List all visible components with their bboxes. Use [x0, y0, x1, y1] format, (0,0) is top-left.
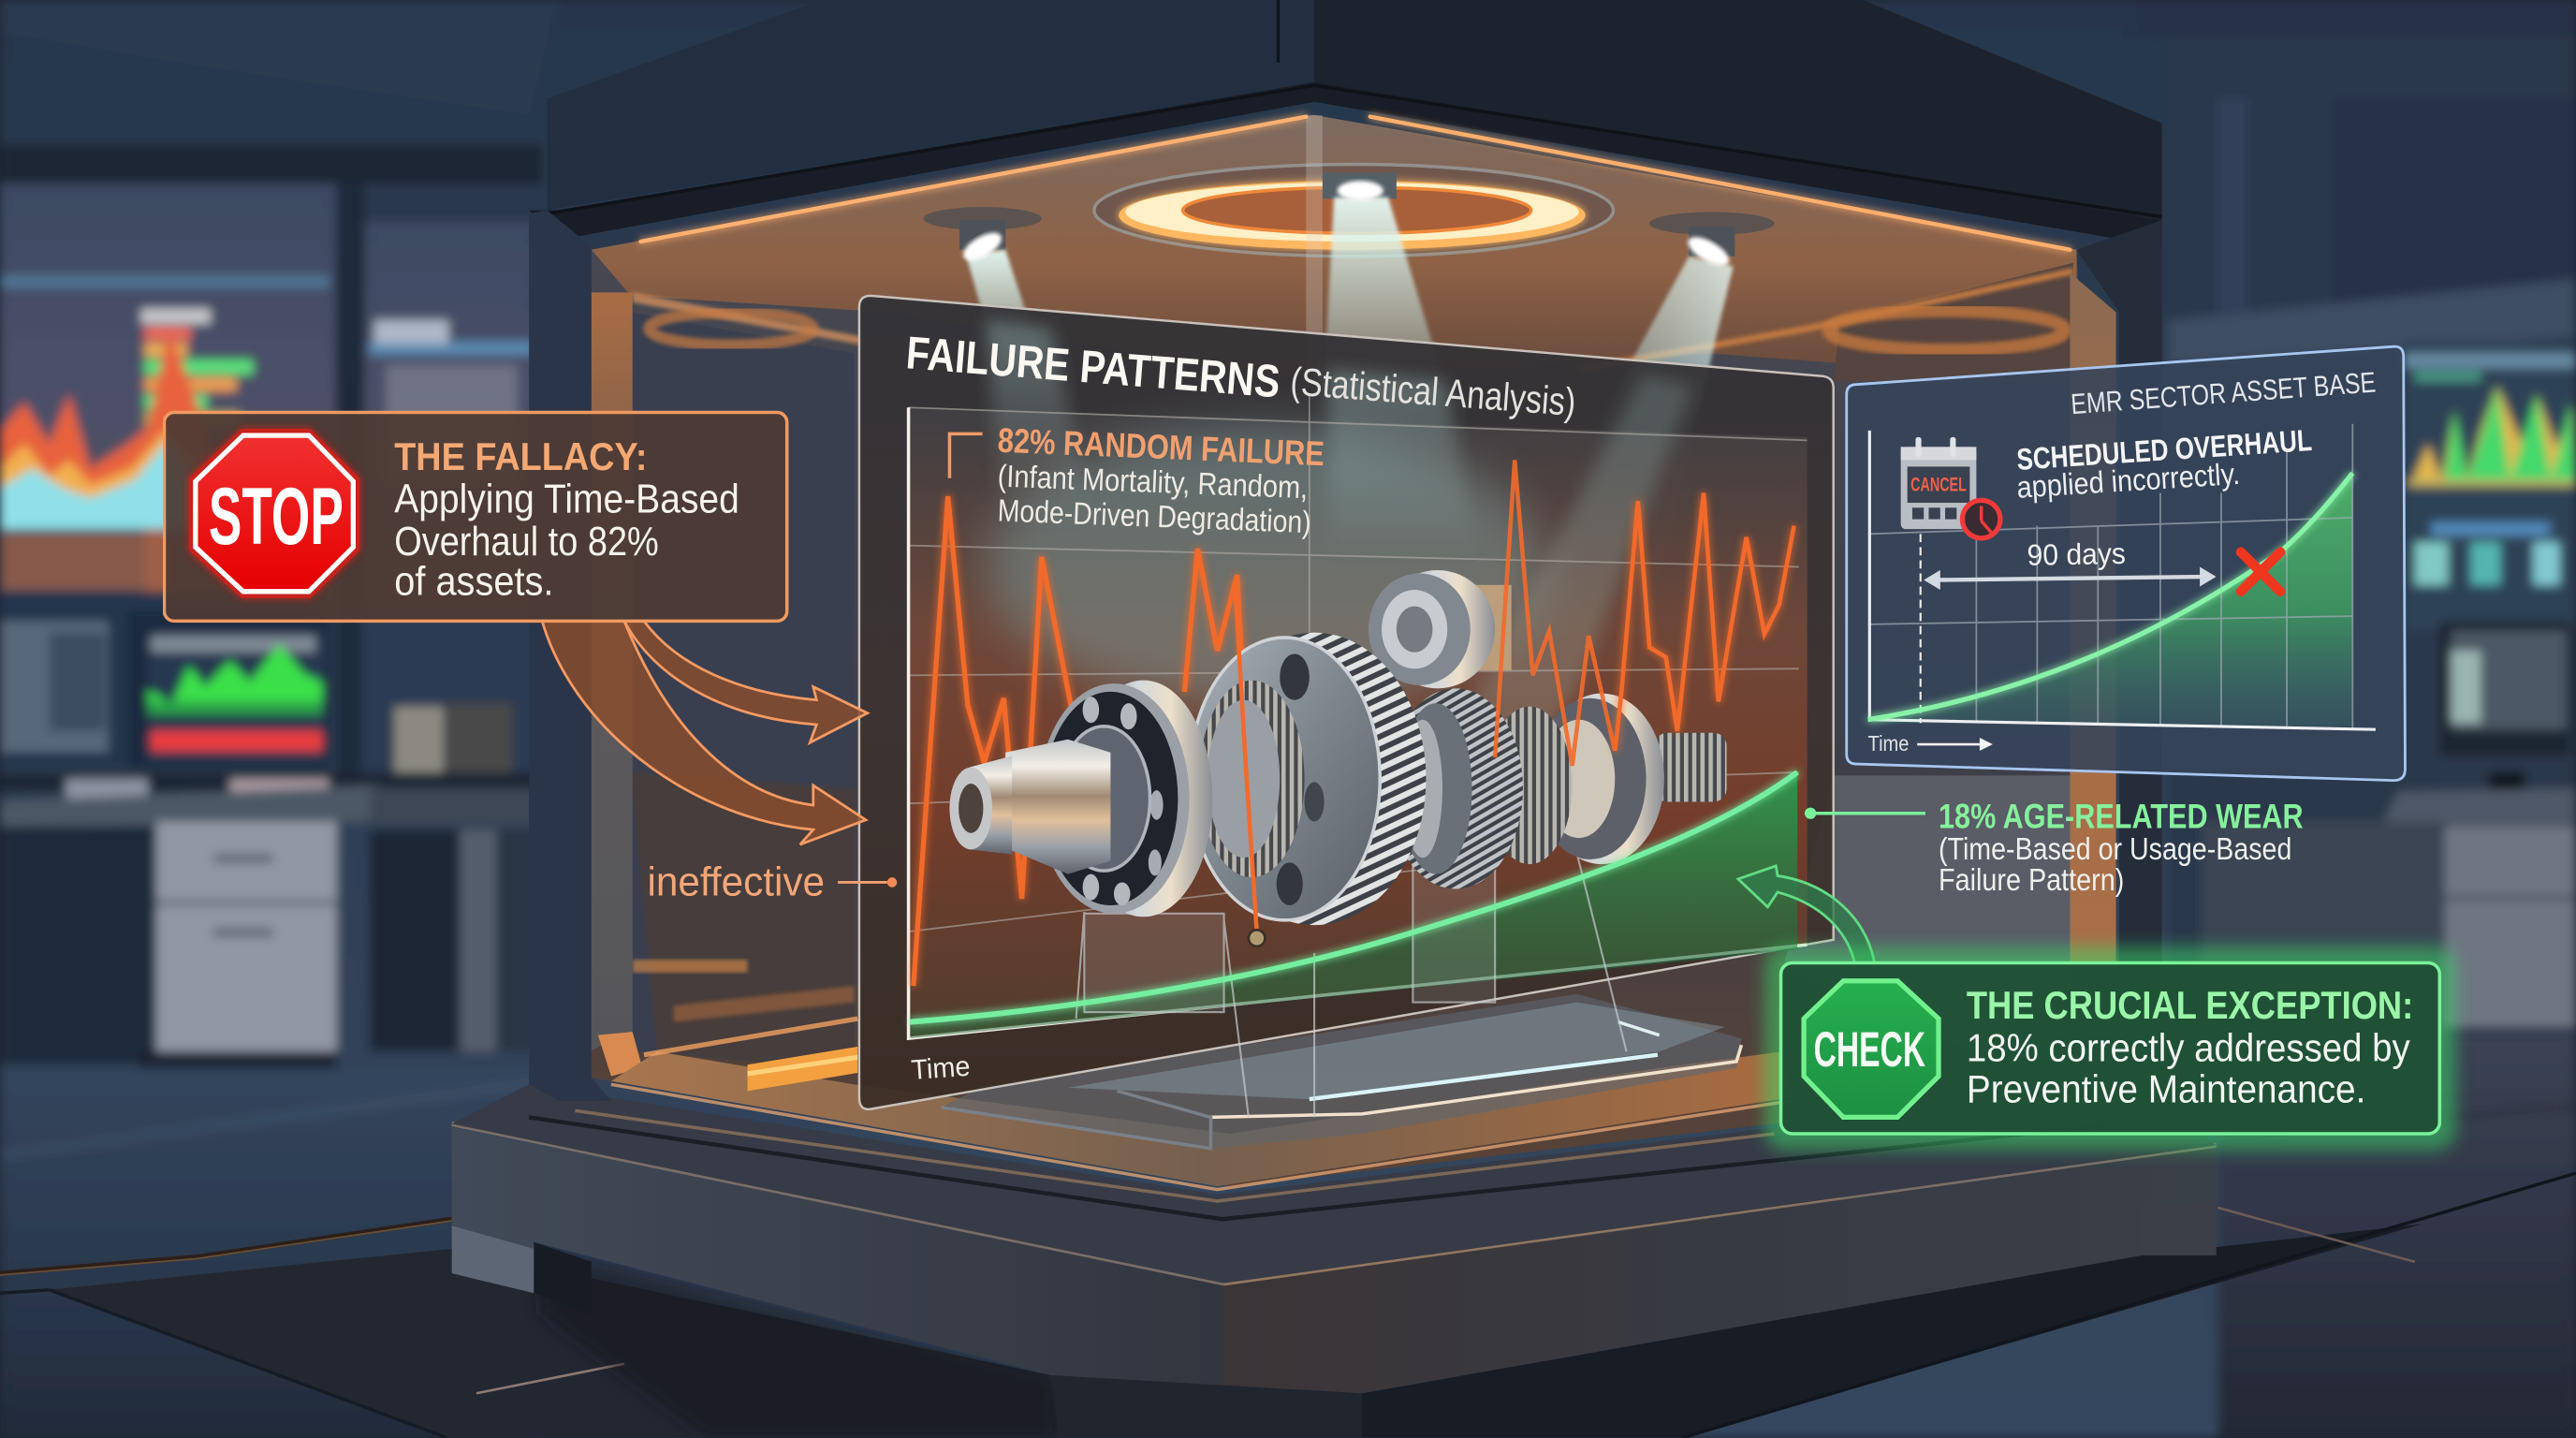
chart background — [909, 407, 1808, 1038]
cabinet top housing — [529, 0, 2162, 246]
axes — [1869, 431, 2376, 729]
green area — [1868, 473, 2352, 726]
icon: stop sign: STOP — [209, 472, 344, 562]
shaft — [949, 740, 1110, 874]
orange failure line over gear — [1236, 460, 1794, 932]
chart grid — [909, 394, 1808, 932]
gear assembly — [949, 570, 1727, 925]
front bearing — [1038, 681, 1212, 917]
axis label: time: Time — [910, 1051, 972, 1086]
label: 90 days: 90 days — [2027, 536, 2126, 572]
body text: of assets. — [394, 558, 553, 604]
panel subtitle: (Statistical Analysis) — [1289, 359, 1577, 424]
small fastener — [1249, 930, 1265, 946]
axis label: time — [1868, 731, 1993, 756]
label: 18% age-related wear — [1805, 798, 2304, 898]
rear bearing right — [1534, 694, 1664, 864]
glass enclosure interior — [529, 115, 2162, 1190]
label: 18% age-related wear: Failure Pattern) — [1939, 863, 2124, 898]
grid — [1868, 424, 2352, 727]
icon: red X — [2241, 552, 2280, 592]
end splines — [1654, 733, 1727, 801]
arrow: 90 days span — [1924, 566, 2217, 590]
cabinet base — [452, 1084, 2217, 1438]
panel: EMR sector asset base — [1847, 346, 2405, 781]
body text: Preventive Maintenance. — [1967, 1067, 2365, 1111]
light beams over panel — [986, 320, 1692, 822]
orange failure line left — [914, 496, 1075, 986]
spotlights and beams — [923, 115, 1775, 657]
schedule start marker — [1920, 534, 1922, 723]
heading: scheduled overhaul: applied incorrectly. — [2015, 457, 2241, 505]
callout: the fallacy — [165, 413, 787, 621]
label: 18% age-related wear: (Time-Based or Usage-Based — [1939, 832, 2291, 867]
orange failure line middle — [1184, 549, 1245, 723]
heading: THE FALLACY: — [394, 434, 648, 478]
rear bearing — [1368, 570, 1512, 688]
body text: 18% correctly addressed by — [1967, 1026, 2410, 1070]
floor tile lines and cable — [0, 1173, 2576, 1438]
icon: cancelled calendar: CANCEL — [1910, 475, 1967, 496]
panel: failure patterns — [859, 296, 1834, 1117]
icon: check octagon: CHECK — [1814, 1022, 1925, 1078]
label: 82% random failure: 82% RANDOM FAILURE — [997, 421, 1325, 473]
arrows: fallacy to failure chart — [542, 621, 868, 844]
chart axes — [909, 407, 1808, 1038]
icon: cancelled calendar — [1901, 437, 2000, 538]
label: ineffective: ineffective — [648, 858, 825, 904]
label: 82% random failure: Mode-Driven Degradation) — [997, 493, 1311, 540]
platform under gear assembly — [942, 994, 1741, 1149]
body text: Overhaul to 82% — [394, 519, 659, 565]
body text — [394, 477, 739, 604]
label: 82% random failure — [997, 421, 1325, 540]
green wear curve — [910, 772, 1797, 1022]
haze over chart — [986, 427, 1544, 707]
random failure bracket — [949, 433, 983, 478]
label: 18% age-related wear: 18% AGE-RELATED WEAR — [1939, 798, 2304, 836]
ceiling light ring — [1094, 165, 1614, 257]
gear stand — [1076, 855, 1627, 1117]
icon: check octagon — [1804, 981, 1939, 1117]
body text: Applying Time-Based — [394, 477, 739, 522]
heading: scheduled overhaul: SCHEDULED OVERHAUL — [2015, 423, 2313, 477]
arrow: exception to green area — [1738, 866, 1875, 962]
growth curve — [1868, 473, 2352, 720]
header: EMR SECTOR ASSET BASE — [2070, 365, 2377, 420]
icon: stop sign — [189, 429, 359, 598]
heading: scheduled overhaul — [2015, 423, 2313, 505]
heading: THE CRUCIAL EXCEPTION: — [1967, 983, 2413, 1027]
shadow under cabinet — [534, 1242, 1060, 1438]
callout: the crucial exception — [1764, 946, 2456, 1151]
green area — [910, 772, 1797, 1038]
panel title: FAILURE PATTERNS — [904, 328, 1281, 407]
rear gears — [1388, 688, 1573, 888]
label: 82% random failure: (Infant Mortality, Random, — [997, 460, 1309, 506]
body text — [1967, 1026, 2410, 1111]
main gear — [1190, 633, 1426, 925]
axis label: time: Time — [1868, 731, 1909, 756]
ceiling LED strips — [640, 117, 2070, 250]
